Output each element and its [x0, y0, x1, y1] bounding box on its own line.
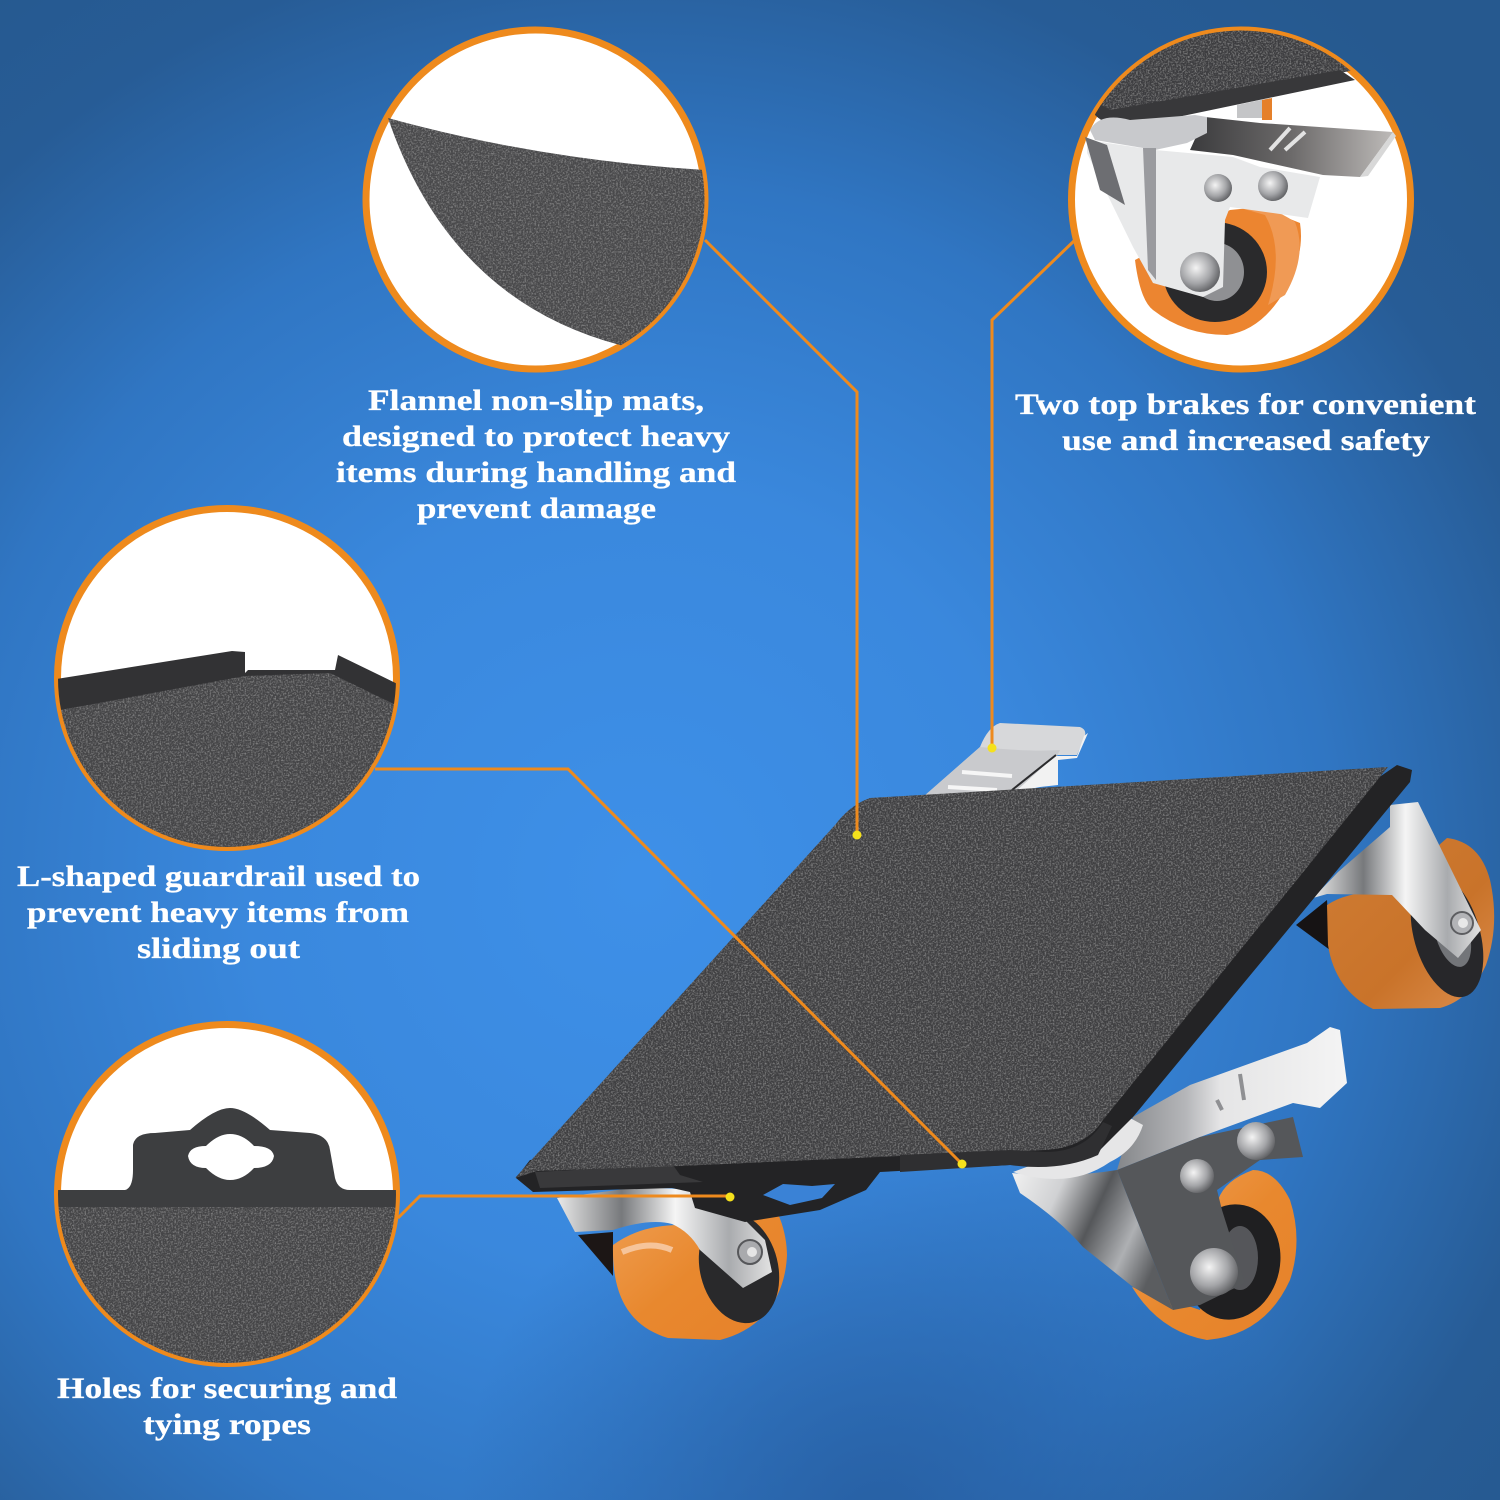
felt mat top: [515, 767, 1388, 1178]
connector: flannel mat: [705, 240, 862, 840]
callout circle: flannel mat: [366, 30, 720, 380]
front right brake caster: [1012, 1027, 1347, 1340]
callout circle: rope holes: [50, 1024, 400, 1370]
text: flannel mats: Flannel non-slip mats,: [368, 384, 704, 417]
connector: brakes: [988, 240, 1075, 752]
callout circle: L-shaped guardrail: [50, 508, 410, 860]
text: rope holes: tying ropes: [143, 1408, 311, 1441]
right rear caster: [1296, 802, 1496, 1009]
front left caster: [557, 1187, 790, 1340]
text: guardrail: sliding out: [137, 932, 300, 965]
platform underside frame and tab: [516, 765, 1412, 1222]
text: guardrail: L-shaped guardrail used to: [17, 860, 420, 893]
text: flannel mats: items during handling and: [336, 456, 736, 489]
rail lip: [900, 1122, 1112, 1172]
text: flannel mats: prevent damage: [417, 492, 656, 525]
text: brakes: use and increased safety: [1062, 424, 1430, 457]
text: brakes: [1015, 388, 1476, 457]
text: rope holes: Holes for securing and: [57, 1372, 397, 1405]
text: flannel mats: designed to protect heavy: [342, 420, 730, 453]
text: brakes: Two top brakes for convenient: [1015, 388, 1476, 421]
connector: guardrail: [375, 769, 966, 1168]
rear brake pedal: [923, 723, 1088, 797]
text: rope holes: [57, 1372, 397, 1441]
callout circle: brake caster: [1060, 20, 1410, 369]
connector: rope holes: [398, 1192, 734, 1218]
text: flannel mats: [336, 384, 736, 525]
product: moving dolly: [515, 723, 1496, 1340]
text: guardrail: [17, 860, 420, 965]
text: guardrail: prevent heavy items from: [27, 896, 409, 929]
